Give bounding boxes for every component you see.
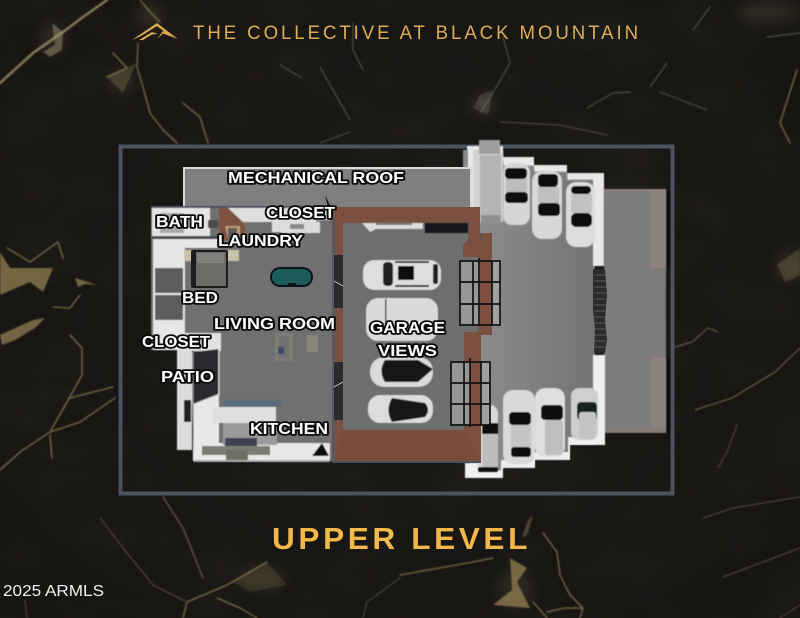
right pad (604, 189, 670, 433)
parked cars: top row (503, 163, 595, 247)
garage (332, 207, 492, 463)
garage view windows: lower (451, 358, 490, 427)
van (473, 140, 503, 224)
garage cars (362, 223, 468, 423)
mechanical roof (183, 167, 472, 209)
title: THE COLLECTIVE AT BLACK MOUNTAIN (193, 23, 641, 44)
room labels: LIVING ROOM (214, 316, 335, 333)
table: teal (270, 267, 313, 287)
living room rug and furniture (275, 333, 318, 361)
room labels (142, 170, 445, 438)
garage view windows: upper (460, 258, 500, 326)
room labels: MECHANICAL ROOF (228, 170, 404, 187)
bed (191, 250, 228, 288)
floor plan (151, 140, 670, 478)
fence (593, 269, 607, 353)
level heading: UPPER LEVEL (272, 522, 531, 556)
parked cars: bottom row (477, 388, 598, 472)
logo: mountain peaks (132, 23, 178, 40)
room labels: CLOSET (142, 334, 211, 351)
room labels: CLOSET (266, 205, 336, 222)
kitchen (192, 394, 330, 462)
stepped white walls (463, 146, 605, 478)
property outline frame (120, 146, 672, 494)
room labels: KITCHEN (250, 421, 328, 438)
room labels: BED (182, 290, 218, 307)
room labels: VIEWS (378, 343, 437, 360)
bedroom (153, 239, 239, 350)
room labels: PATIO (161, 369, 214, 386)
room labels: LAUNDRY (218, 233, 304, 250)
driveway (470, 160, 595, 470)
room labels: BATH (156, 214, 203, 231)
copyright: 2025 ARMLS (3, 583, 104, 600)
patio and closet (177, 333, 221, 450)
upper-left rooms: bath and laundry (151, 206, 334, 461)
room labels: GARAGE (370, 320, 445, 337)
